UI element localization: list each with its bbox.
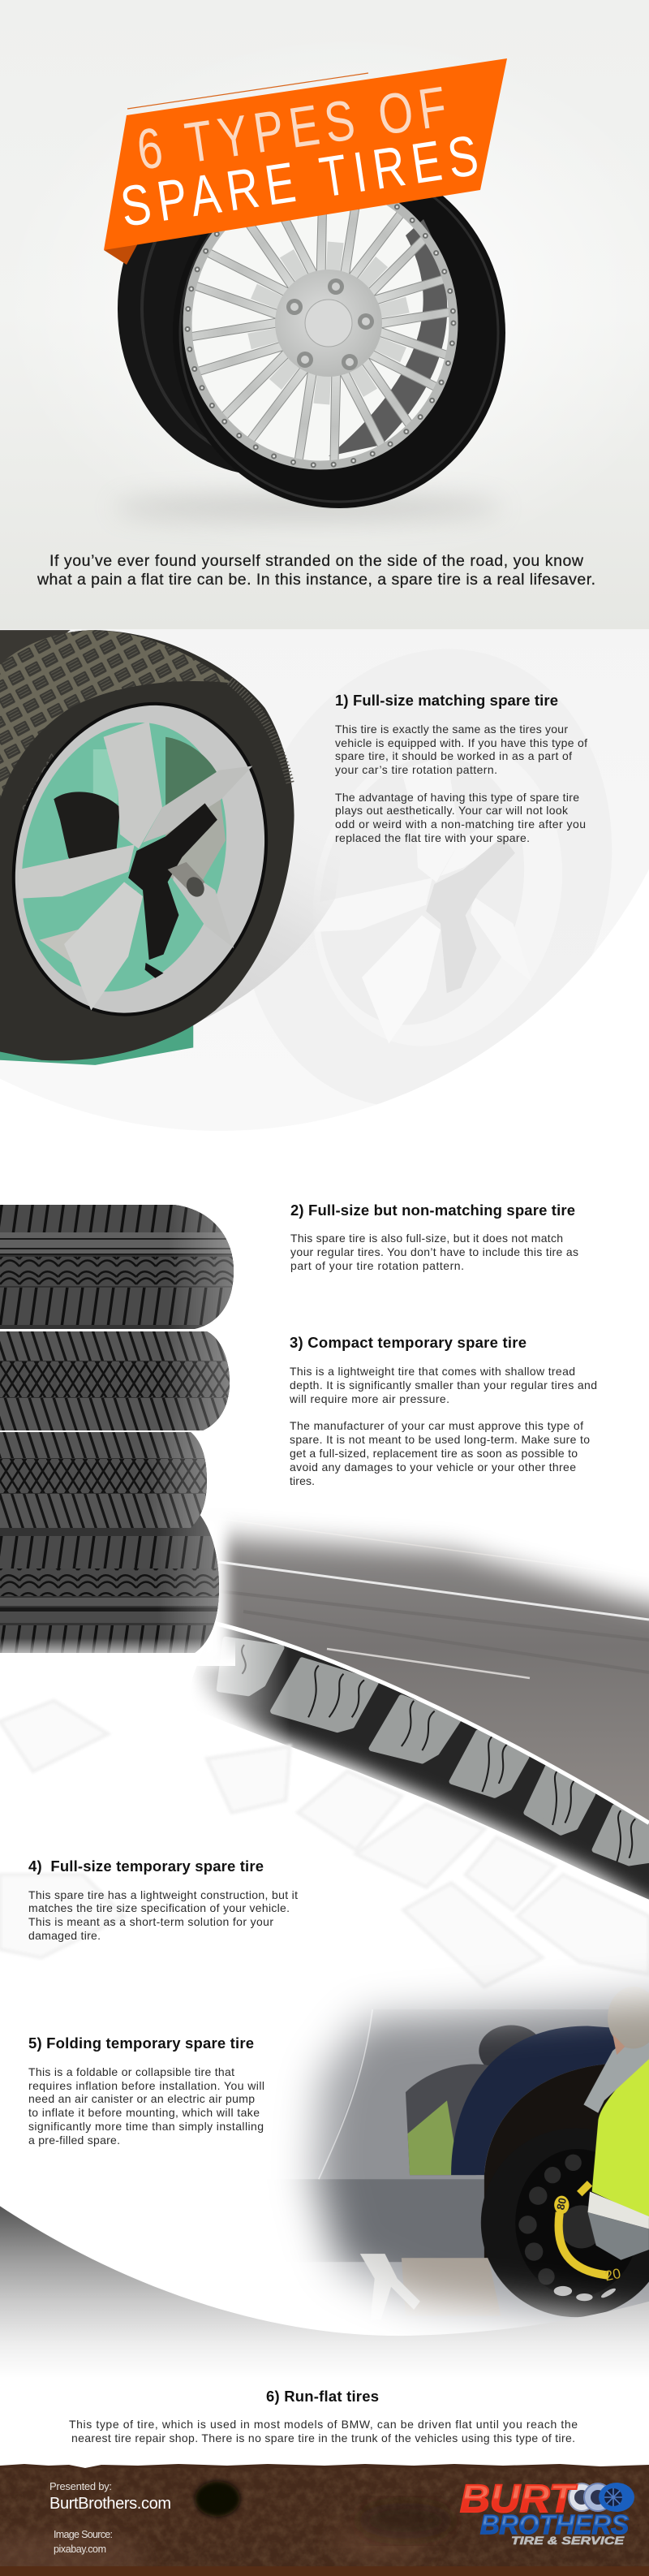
panel: section 1 background shapes (0, 629, 649, 1104)
photo: mounted tire on green machine: 245/45 R17 (19, 752, 62, 815)
text: section 5: need an air canister or an electric air pump (28, 2092, 255, 2105)
text: section 4: This is meant as a short-term solution for your (28, 1915, 273, 1928)
text: section 4 (28, 1858, 298, 1942)
icon: logo tires (569, 2483, 634, 2512)
text: section 3: spare. It is not meant to be used long-term. Make sure to (290, 1433, 590, 1446)
text: section 5: significantly more time than simply installing (28, 2120, 264, 2133)
text: section 5: 5) Folding temporary spare tire (28, 2034, 254, 2052)
text: section 5: a pre-filled spare. (28, 2134, 120, 2147)
orange title banner (104, 58, 507, 250)
text: section 2: part of your tire rotation pattern. (290, 1259, 464, 1272)
presenter text (49, 2480, 171, 2555)
text: section 6: nearest tire repair shop. There is no spare tire in the trunk of the vehicles using this type of tire. (71, 2431, 575, 2444)
ghost wheel (321, 836, 524, 1025)
text: section 3: depth. It is significantly smaller than your regular tires and (290, 1379, 597, 1392)
text: section 1: plays out aesthetically. Your car will not look (335, 804, 569, 817)
intro text: what a pain a flat tire can be. In this instance, a spare tire is a real lifesaver. (37, 571, 595, 589)
text: section 4: matches the tire size specification of your vehicle. (28, 1901, 290, 1914)
text: section 1: odd or weird with a non-matching tire after you (335, 818, 586, 831)
photo: mounted tire on green machine (0, 630, 302, 1065)
text: section 3 (289, 1334, 597, 1487)
faint tread blocks (0, 1701, 649, 1987)
icon: alloy wheel (118, 196, 505, 508)
lower grey curve (0, 2206, 649, 2382)
text: section 3: avoid any damages to your vehicle or your other three (290, 1461, 576, 1474)
banner fold (104, 240, 140, 265)
tire 1 (0, 1205, 234, 1329)
text: section 2: your regular tires. You don’t have to include this tire as (290, 1245, 578, 1258)
tire 2 (0, 1331, 230, 1430)
presenter text: BurtBrothers.com (49, 2495, 171, 2513)
photo: mechanic changing tire: 80 (554, 2197, 569, 2211)
text: section 2: 2) Full-size but non-matching spare tire (290, 1202, 575, 1219)
text: section 2: This spare tire is also full-size, but it does not match (290, 1232, 563, 1245)
text: section 1: spare tire, it should be worked in as a part of (335, 749, 572, 762)
text: section 5: This is a foldable or collapsible tire that (28, 2065, 234, 2078)
logo: Burt Brothers: BURT (460, 2478, 578, 2521)
text: section 1: This tire is exactly the same as the tires your (335, 723, 568, 736)
grey crescent (0, 667, 356, 1060)
logo: Burt Brothers: TIRE & SERVICE (511, 2534, 625, 2547)
text: section 1: vehicle is equipped with. If you have this type of (335, 736, 587, 749)
text: section 3: This is a lightweight tire that comes with shallow tread (290, 1365, 575, 1378)
text: section 3: The manufacturer of your car must approve this type of (290, 1419, 583, 1432)
banner accent line (127, 73, 368, 109)
text: section 2 (290, 1202, 578, 1272)
rim opening (0, 699, 256, 1015)
text: section 4: 4) Full-size temporary spare tire (28, 1858, 264, 1875)
white fade under tread (0, 1642, 649, 2123)
text: section 3: will require more air pressure. (289, 1392, 449, 1405)
logo: Burt Brothers: BROTHERS (480, 2509, 629, 2539)
text: section 3: tires. (290, 1474, 315, 1487)
intro text (37, 552, 595, 589)
photo: road background (217, 1520, 649, 1820)
panel: hero (0, 0, 649, 629)
wheel shadow (114, 494, 503, 520)
logo: Burt Brothers (460, 2478, 634, 2547)
presenter text: Image Source: (54, 2529, 113, 2540)
text: section 3: 3) Compact temporary spare tire (290, 1334, 527, 1351)
text: section 1: your car’s tire rotation pattern. (335, 763, 497, 776)
text: section 4: damaged tire. (28, 1929, 101, 1942)
white halo beside stack (193, 1510, 227, 1664)
text: section 4: This spare tire has a lightweight construction, but it (28, 1888, 298, 1901)
text: section 1: replaced the flat tire with your spare. (335, 831, 530, 844)
title: SPARE TIRES (117, 123, 482, 239)
text: section 6: This type of tire, which is used in most models of BMW, can be driven flat until you reach the (69, 2418, 578, 2431)
dark hole (195, 2481, 240, 2517)
intro text: If you’ve ever found yourself stranded on the side of the road, you know (49, 552, 584, 570)
photo: tire stack (0, 1205, 235, 1666)
text: section 6: 6) Run-flat tires (266, 2388, 379, 2405)
photo: mechanic changing tire: 20 (604, 2265, 622, 2284)
panel: footer (0, 2464, 649, 2576)
tire 4 (0, 1513, 219, 1653)
text: section 1: The advantage of having this type of spare tire (335, 791, 579, 804)
text: section 5 (28, 2034, 264, 2147)
text: section 5: requires inflation before installation. You will (28, 2079, 264, 2092)
photo: mechanic changing tire (286, 1973, 649, 2332)
text: section 1 (335, 692, 587, 844)
stack bottom fade (0, 1638, 235, 1666)
tire 3 (0, 1432, 207, 1528)
text: section 3: get a full-sized, replacement tire as soon as possible to (290, 1447, 578, 1460)
photo: tread close-up (182, 1623, 649, 1900)
presenter text: Presented by: (49, 2480, 112, 2492)
text: section 1: 1) Full-size matching spare tire (335, 692, 558, 709)
presenter text: pixabay.com (54, 2544, 106, 2555)
text: section 6 (69, 2388, 578, 2444)
text: section 5: to inflate it before mounting, which will take (28, 2106, 260, 2119)
left fade on tread (149, 1621, 290, 1758)
title: 6 TYPES OF (133, 75, 450, 182)
